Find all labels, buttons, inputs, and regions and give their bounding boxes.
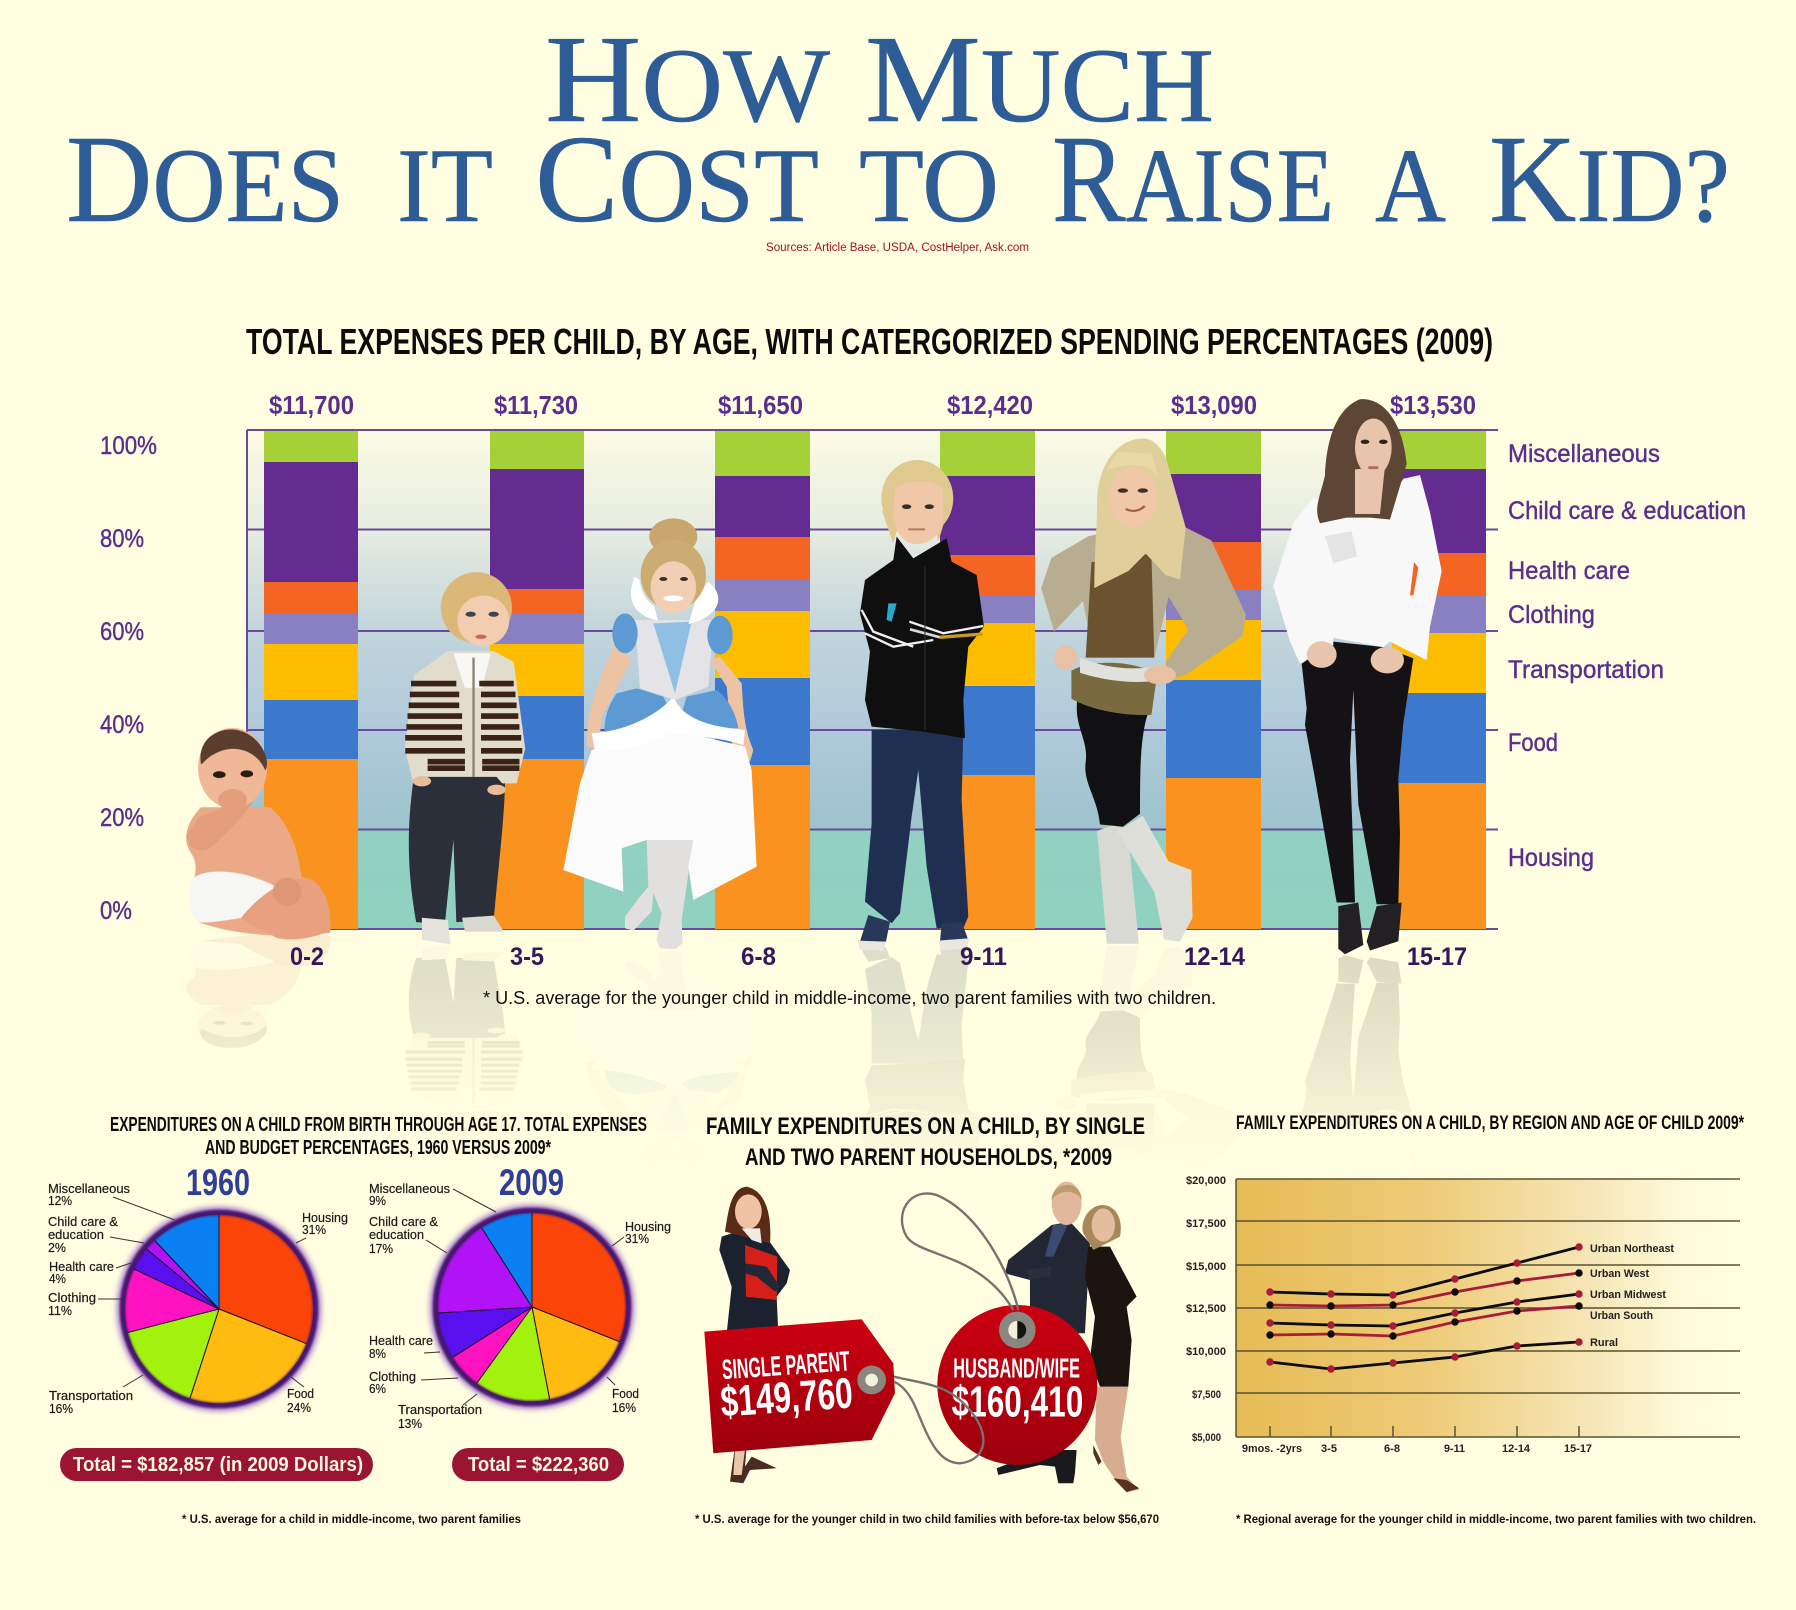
pie labels 2009: Child care &: [369, 1214, 438, 1229]
pie labels 1960: Transportation: [49, 1388, 133, 1403]
category legend labels: Housing: [1508, 844, 1594, 872]
bar: ages 3-5: [490, 431, 584, 929]
series labels: [1590, 1243, 1674, 1349]
price labels above bars: $13,530: [1390, 390, 1476, 420]
panel: pie charts 1960 vs 2009: [48, 1114, 671, 1526]
bar: ages 6-8: [715, 431, 810, 929]
pie panel heading: AND BUDGET PERCENTAGES, 1960 VERSUS 2009*: [205, 1137, 551, 1159]
age labels: 15-17: [1407, 943, 1467, 971]
percentage axis labels: 60%: [100, 618, 144, 646]
household panel heading: AND TWO PARENT HOUSEHOLDS, *2009: [745, 1144, 1112, 1171]
panel: regional line chart: [1186, 1113, 1756, 1526]
pie labels 1960: Clothing: [48, 1290, 96, 1305]
series: urban northeast: [1266, 1243, 1583, 1299]
panel: single vs two parent: [695, 1113, 1159, 1526]
bar: ages 9-11: [940, 431, 1035, 929]
series: urban west: [1266, 1269, 1583, 1310]
total pill 2009: Total = $222,360: [468, 1454, 609, 1476]
title: IT: [397, 127, 493, 244]
percentage axis labels: 100%: [100, 432, 157, 460]
bar: ages 15-17: [1392, 431, 1486, 929]
household footnote: * U.S. average for the younger child in two child families with before-tax below $56,670: [695, 1512, 1159, 1526]
y axis labels: $20,000: [1186, 1175, 1226, 1187]
pie labels 1960: education: [48, 1227, 104, 1242]
series labels: Urban South: [1590, 1310, 1653, 1322]
x axis labels: 3-5: [1321, 1443, 1337, 1455]
age labels: 6-8: [741, 943, 776, 971]
total pill 2009: [452, 1448, 624, 1481]
figure: toddler boy: [405, 572, 525, 945]
pie labels 2009: Health care: [369, 1333, 433, 1348]
pie labels 2009: Transportation: [398, 1402, 482, 1417]
price labels above bars: $11,650: [718, 390, 803, 420]
bar: ages 12-14: [1166, 431, 1261, 929]
pie labels 1960: Child care &: [48, 1214, 118, 1229]
series: rural: [1266, 1338, 1583, 1373]
category legend labels: [1508, 440, 1746, 872]
figure: husband and wife: [997, 1182, 1139, 1492]
title: MUCH: [865, 11, 1214, 149]
pie footnote: * U.S. average for a child in middle-income, two parent families: [182, 1512, 521, 1526]
plot background and grid: [1236, 1179, 1740, 1437]
title: TO: [859, 127, 999, 244]
price tag: single parent: $149,760: [719, 1369, 854, 1427]
pie chart 1960: [117, 1207, 321, 1411]
category legend labels: Transportation: [1508, 656, 1664, 684]
pie labels 2009: [369, 1181, 671, 1431]
pie labels 1960: 2%: [48, 1240, 66, 1255]
title: HOW: [545, 11, 830, 149]
pie labels 1960: Housing: [302, 1210, 348, 1225]
series: urban south: [1266, 1302, 1583, 1340]
category legend labels: Child care & education: [1508, 497, 1746, 525]
series labels: Urban Northeast: [1590, 1243, 1674, 1255]
pie labels 2009: 13%: [398, 1416, 422, 1431]
series: urban midwest: [1266, 1290, 1583, 1330]
percentage axis labels: 20%: [100, 804, 144, 832]
price labels above bars: $12,420: [947, 390, 1033, 420]
pie labels 1960: Miscellaneous: [48, 1181, 130, 1196]
pie labels 2009: 9%: [369, 1193, 386, 1208]
title: COST: [535, 111, 819, 249]
pie labels 2009: Clothing: [369, 1369, 416, 1384]
figure: baby: [186, 728, 330, 939]
series labels: Urban Midwest: [1590, 1289, 1666, 1301]
series labels: Urban West: [1590, 1268, 1649, 1280]
figure: girl in princess dress: [563, 518, 757, 949]
pie labels 1960: Health care: [49, 1259, 114, 1274]
pie labels 2009: 6%: [369, 1381, 386, 1396]
pie labels 1960: 12%: [48, 1193, 72, 1208]
price labels above bars: $13,090: [1171, 390, 1257, 420]
bar: ages 0-2: [264, 431, 358, 929]
household panel heading: FAMILY EXPENDITURES ON A CHILD, BY SINGLE: [706, 1113, 1145, 1140]
y axis labels: $10,000: [1186, 1346, 1226, 1358]
price tag: husband and wife: HUSBAND/WIFE: [953, 1353, 1080, 1384]
title: KID?: [1489, 111, 1730, 249]
chart background and grid: [247, 430, 1498, 929]
pie labels 1960: 4%: [49, 1271, 66, 1286]
pie labels 2009: Housing: [625, 1219, 671, 1234]
x axis labels: [1242, 1443, 1592, 1455]
price tag: husband and wife: $160,410: [952, 1379, 1083, 1427]
pie labels 1960: 11%: [48, 1303, 72, 1318]
pie labels 2009: 31%: [625, 1231, 649, 1246]
sources line: Sources: Article Base, USDA, CostHelper, Ask.com: [766, 242, 1029, 254]
total pill 1960: [60, 1448, 373, 1481]
percentage axis labels: 80%: [100, 525, 144, 553]
pie labels 1960: 16%: [49, 1401, 73, 1416]
age labels: 3-5: [510, 943, 544, 971]
series labels: Rural: [1590, 1337, 1618, 1349]
y axis labels: $17,500: [1186, 1218, 1226, 1230]
y axis labels: $15,000: [1186, 1261, 1226, 1273]
stacked bar chart: [247, 430, 1498, 929]
title: RAISE: [1052, 111, 1334, 249]
figure: teen woman in white top: [1273, 399, 1442, 954]
price labels above bars: $11,700: [269, 390, 354, 420]
pie labels 2009: 16%: [612, 1400, 636, 1415]
category legend labels: Miscellaneous: [1508, 440, 1660, 468]
pie labels 1960: 24%: [287, 1400, 311, 1415]
y axis labels: $12,500: [1186, 1303, 1226, 1315]
age labels: 12-14: [1184, 943, 1245, 971]
x axis labels: 12-14: [1502, 1443, 1531, 1455]
pie panel heading: EXPENDITURES ON A CHILD FROM BIRTH THROUGH AGE 17. TOTAL EXPENSES: [110, 1114, 647, 1136]
pie labels 2009: 17%: [369, 1241, 393, 1256]
year label 2009: 2009: [499, 1162, 564, 1203]
percentage axis labels: 40%: [100, 711, 144, 739]
category legend labels: Clothing: [1508, 601, 1595, 629]
pie labels 1960: [48, 1181, 348, 1416]
regional footnote: * Regional average for the younger child in middle-income, two parent families with two children.: [1236, 1512, 1756, 1526]
tag strings: [894, 1193, 1018, 1463]
y axis labels: $7,500: [1192, 1389, 1221, 1401]
age labels: [290, 943, 1467, 971]
x axis labels: 15-17: [1564, 1443, 1592, 1455]
year label 1960: 1960: [186, 1162, 250, 1203]
figure: single mother: [719, 1187, 790, 1483]
floor reflections of the children: [186, 935, 1413, 1129]
percentage axis labels: 0%: [100, 897, 132, 925]
age labels: 9-11: [960, 943, 1007, 971]
chart footnote: * U.S. average for the younger child in middle-income, two parent families with two children.: [483, 988, 1216, 1008]
household panel heading: [706, 1113, 1145, 1171]
pie labels 2009: Miscellaneous: [369, 1181, 450, 1196]
price tag: single parent: [704, 1319, 895, 1453]
pie labels 2009: education: [369, 1227, 424, 1242]
pie labels 2009: Food: [612, 1386, 639, 1401]
category legend labels: Health care: [1508, 557, 1630, 585]
pie labels 1960: Food: [287, 1386, 314, 1401]
price tag: single parent: SINGLE PARENT: [721, 1345, 851, 1385]
title: DOES: [66, 111, 344, 249]
y axis labels: [1186, 1175, 1226, 1444]
pie chart 2009: [430, 1205, 634, 1409]
title: A: [1375, 127, 1446, 244]
price labels above bars: $11,730: [494, 390, 578, 420]
title: [66, 11, 1730, 249]
age labels: 0-2: [290, 943, 324, 971]
total pill 1960: Total = $182,857 (in 2009 Dollars): [73, 1454, 363, 1476]
figure: boy in black jacket: [858, 460, 984, 951]
pie labels 2009: 8%: [369, 1346, 386, 1361]
price tag: husband and wife: [937, 1305, 1097, 1465]
percentage axis labels: [100, 432, 157, 925]
x axis labels: 6-8: [1384, 1443, 1400, 1455]
pie panel heading: [110, 1114, 647, 1159]
figure: teen girl with gold jacket: [1041, 438, 1246, 944]
price labels above bars: [269, 390, 1476, 420]
pie labels 1960: 31%: [302, 1222, 326, 1237]
x axis labels: 9-11: [1444, 1443, 1465, 1455]
x axis labels: 9mos. -2yrs: [1242, 1443, 1302, 1455]
y axis labels: $5,000: [1192, 1432, 1221, 1444]
category legend labels: Food: [1508, 729, 1558, 757]
